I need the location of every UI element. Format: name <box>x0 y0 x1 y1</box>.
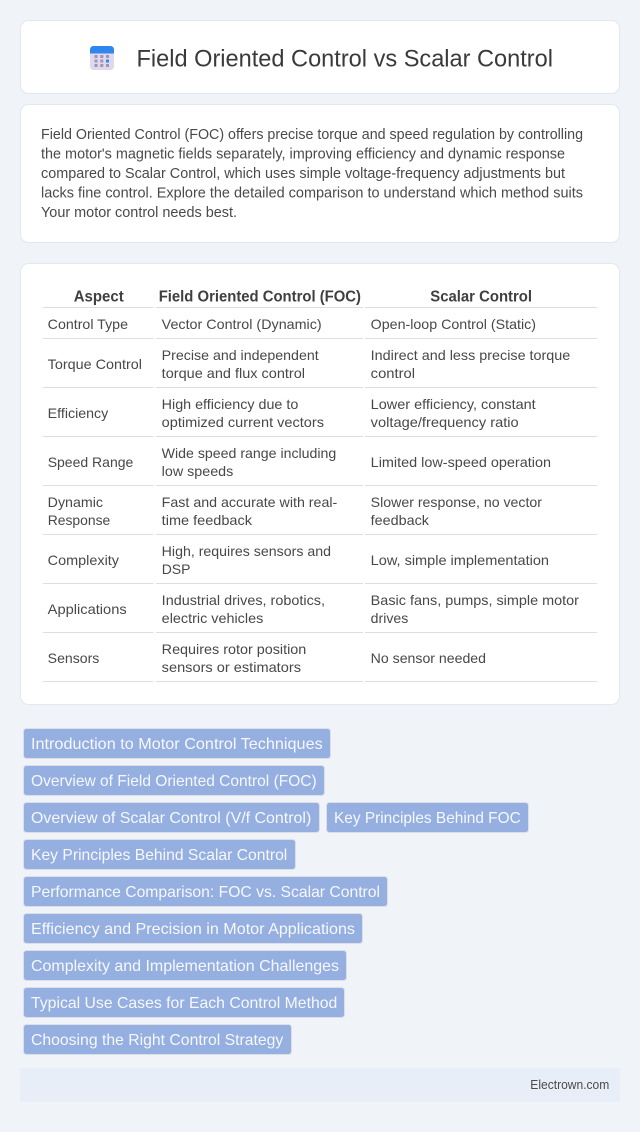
row: Sensors: sensors or estimators <box>162 659 301 675</box>
row: Dynamic Response: Fast and accurate with real- <box>162 494 338 510</box>
text block: introduction paragraph: lacks fine control. Explore the detailed comparison to understand which method suits <box>41 185 583 201</box>
row: Applications: Industrial drives, robotics, <box>162 592 325 608</box>
row: Torque Control: Torque Control <box>48 356 142 372</box>
topic tag: Complexity and Implementation Challenges: Complexity and Implementation Challenges <box>31 958 339 975</box>
topic tag: Key Principles Behind Scalar Control: Key Principles Behind Scalar Control <box>31 847 287 864</box>
text block: introduction paragraph: Field Oriented Control (FOC) offers precise torque and speed regulation by controlling <box>41 127 583 143</box>
row: Torque Control: Indirect and less precise torque <box>371 347 571 363</box>
row: Efficiency: Lower efficiency, constant <box>371 396 536 412</box>
table header row: Field Oriented Control (FOC) <box>159 288 361 306</box>
row: Sensors: Requires rotor position <box>162 641 306 657</box>
row: Control Type: Control Type <box>48 316 128 332</box>
row: Applications: Applications <box>48 601 127 617</box>
topic tag: Overview of Field Oriented Control (FOC): Overview of Field Oriented Control (FOC) <box>31 773 317 790</box>
topic tag: Key Principles Behind FOC: Key Principles Behind FOC <box>334 810 521 827</box>
row: Complexity: Complexity <box>48 552 119 568</box>
row: Dynamic Response: time feedback <box>162 512 253 528</box>
text block: introduction paragraph: the motor's magnetic fields separately, improving efficiency and dynamic response <box>41 146 565 162</box>
row: Speed Range: Speed Range <box>48 454 134 470</box>
text block: introduction paragraph: Your motor control needs best. <box>41 205 237 221</box>
topic tag: Overview of Scalar Control (V/f Control) <box>24 802 320 832</box>
panel: comparison table <box>20 264 620 704</box>
topic tag: Performance Comparison <box>24 876 388 906</box>
row: Control Type: Open-loop Control (Static) <box>371 316 536 332</box>
topic tag: Key Principles Behind Scalar Control <box>24 840 296 870</box>
row: Applications: drives <box>371 610 408 626</box>
row: Speed Range: Wide speed range including <box>162 445 336 461</box>
footer <box>20 1068 620 1102</box>
topic tag: Typical Use Cases <box>24 988 344 1018</box>
topic tag: Performance Comparison: Performance Comparison: FOC vs. Scalar Control <box>31 884 380 901</box>
row: Control Type: Vector Control (Dynamic) <box>162 316 322 332</box>
row: Sensors: No sensor needed <box>371 650 486 666</box>
text block: introduction paragraph: compared to Scalar Control, which uses simple voltage-frequency adjustments but <box>41 166 565 182</box>
row: Speed Range: Limited low-speed operation <box>371 454 551 470</box>
row: Complexity: High, requires sensors and <box>162 543 331 559</box>
row: Sensors <box>48 641 486 675</box>
row: Efficiency: voltage/frequency ratio <box>371 414 519 430</box>
row: Complexity: Low, simple implementation <box>371 552 549 568</box>
row: Applications: Basic fans, pumps, simple motor <box>371 592 579 608</box>
topic tag: Introduction to Motor Control Techniques: Introduction to Motor Control Techniques <box>31 736 323 753</box>
topic tag: Complexity and Implementation Challenges <box>24 950 346 980</box>
table header row: Scalar Control <box>430 288 532 306</box>
text block: introduction paragraph <box>41 127 583 221</box>
row: Dynamic Response: Slower response, no vector <box>371 494 542 510</box>
icon: calendar <box>90 46 114 70</box>
table header row <box>74 288 532 306</box>
footer: Electrown.com <box>530 1077 609 1092</box>
topic tag: Key Principles Behind FOC <box>326 802 528 832</box>
row: Torque Control: control <box>371 365 415 381</box>
topic tag: Choosing the Right Control Strategy <box>24 1024 292 1054</box>
row: Dynamic Response: Dynamic <box>48 494 103 510</box>
row: Efficiency: optimized current vectors <box>162 414 324 430</box>
row: Speed Range <box>48 445 551 479</box>
row: Efficiency: High efficiency due to <box>162 396 299 412</box>
topic tag: Overview of Field Oriented Control (FOC) <box>24 766 324 796</box>
row: Dynamic Response: feedback <box>371 512 430 528</box>
row: Applications <box>48 592 579 626</box>
row: Dynamic Response: Response <box>48 512 111 528</box>
row: Sensors: Sensors <box>48 650 99 666</box>
row: Complexity: DSP <box>162 561 190 577</box>
row: Applications: electric vehicles <box>162 610 263 626</box>
row: Efficiency <box>48 396 536 430</box>
row: Control Type <box>48 316 536 332</box>
topic tag: Introduction to Motor Control Techniques <box>24 728 330 758</box>
table header row: Aspect <box>74 288 124 306</box>
topic tag: Typical Use Cases: Typical Use Cases for Each Control Method <box>31 995 337 1012</box>
row: Speed Range: low speeds <box>162 463 233 479</box>
topic tag: Efficiency and Precision: Efficiency and Precision in Motor Applications <box>31 921 355 938</box>
topic tag: Choosing the Right Control Strategy: Choosing the Right Control Strategy <box>31 1032 283 1049</box>
row: Efficiency: Efficiency <box>48 405 108 421</box>
topic tag: Efficiency and Precision <box>24 914 362 944</box>
topic tag: Overview of Scalar Control (V/f Control): Overview of Scalar Control (V/f Control) <box>31 810 311 827</box>
row: Torque Control: torque and flux control <box>162 365 305 381</box>
row: Dynamic Response <box>48 494 542 528</box>
panel: header <box>20 20 620 94</box>
title: Field Oriented Control vs Scalar Control <box>136 46 553 73</box>
row: Complexity <box>48 543 549 577</box>
panel: introduction <box>20 104 620 242</box>
row: Torque Control: Precise and independent <box>162 347 319 363</box>
row: Torque Control <box>48 347 571 381</box>
